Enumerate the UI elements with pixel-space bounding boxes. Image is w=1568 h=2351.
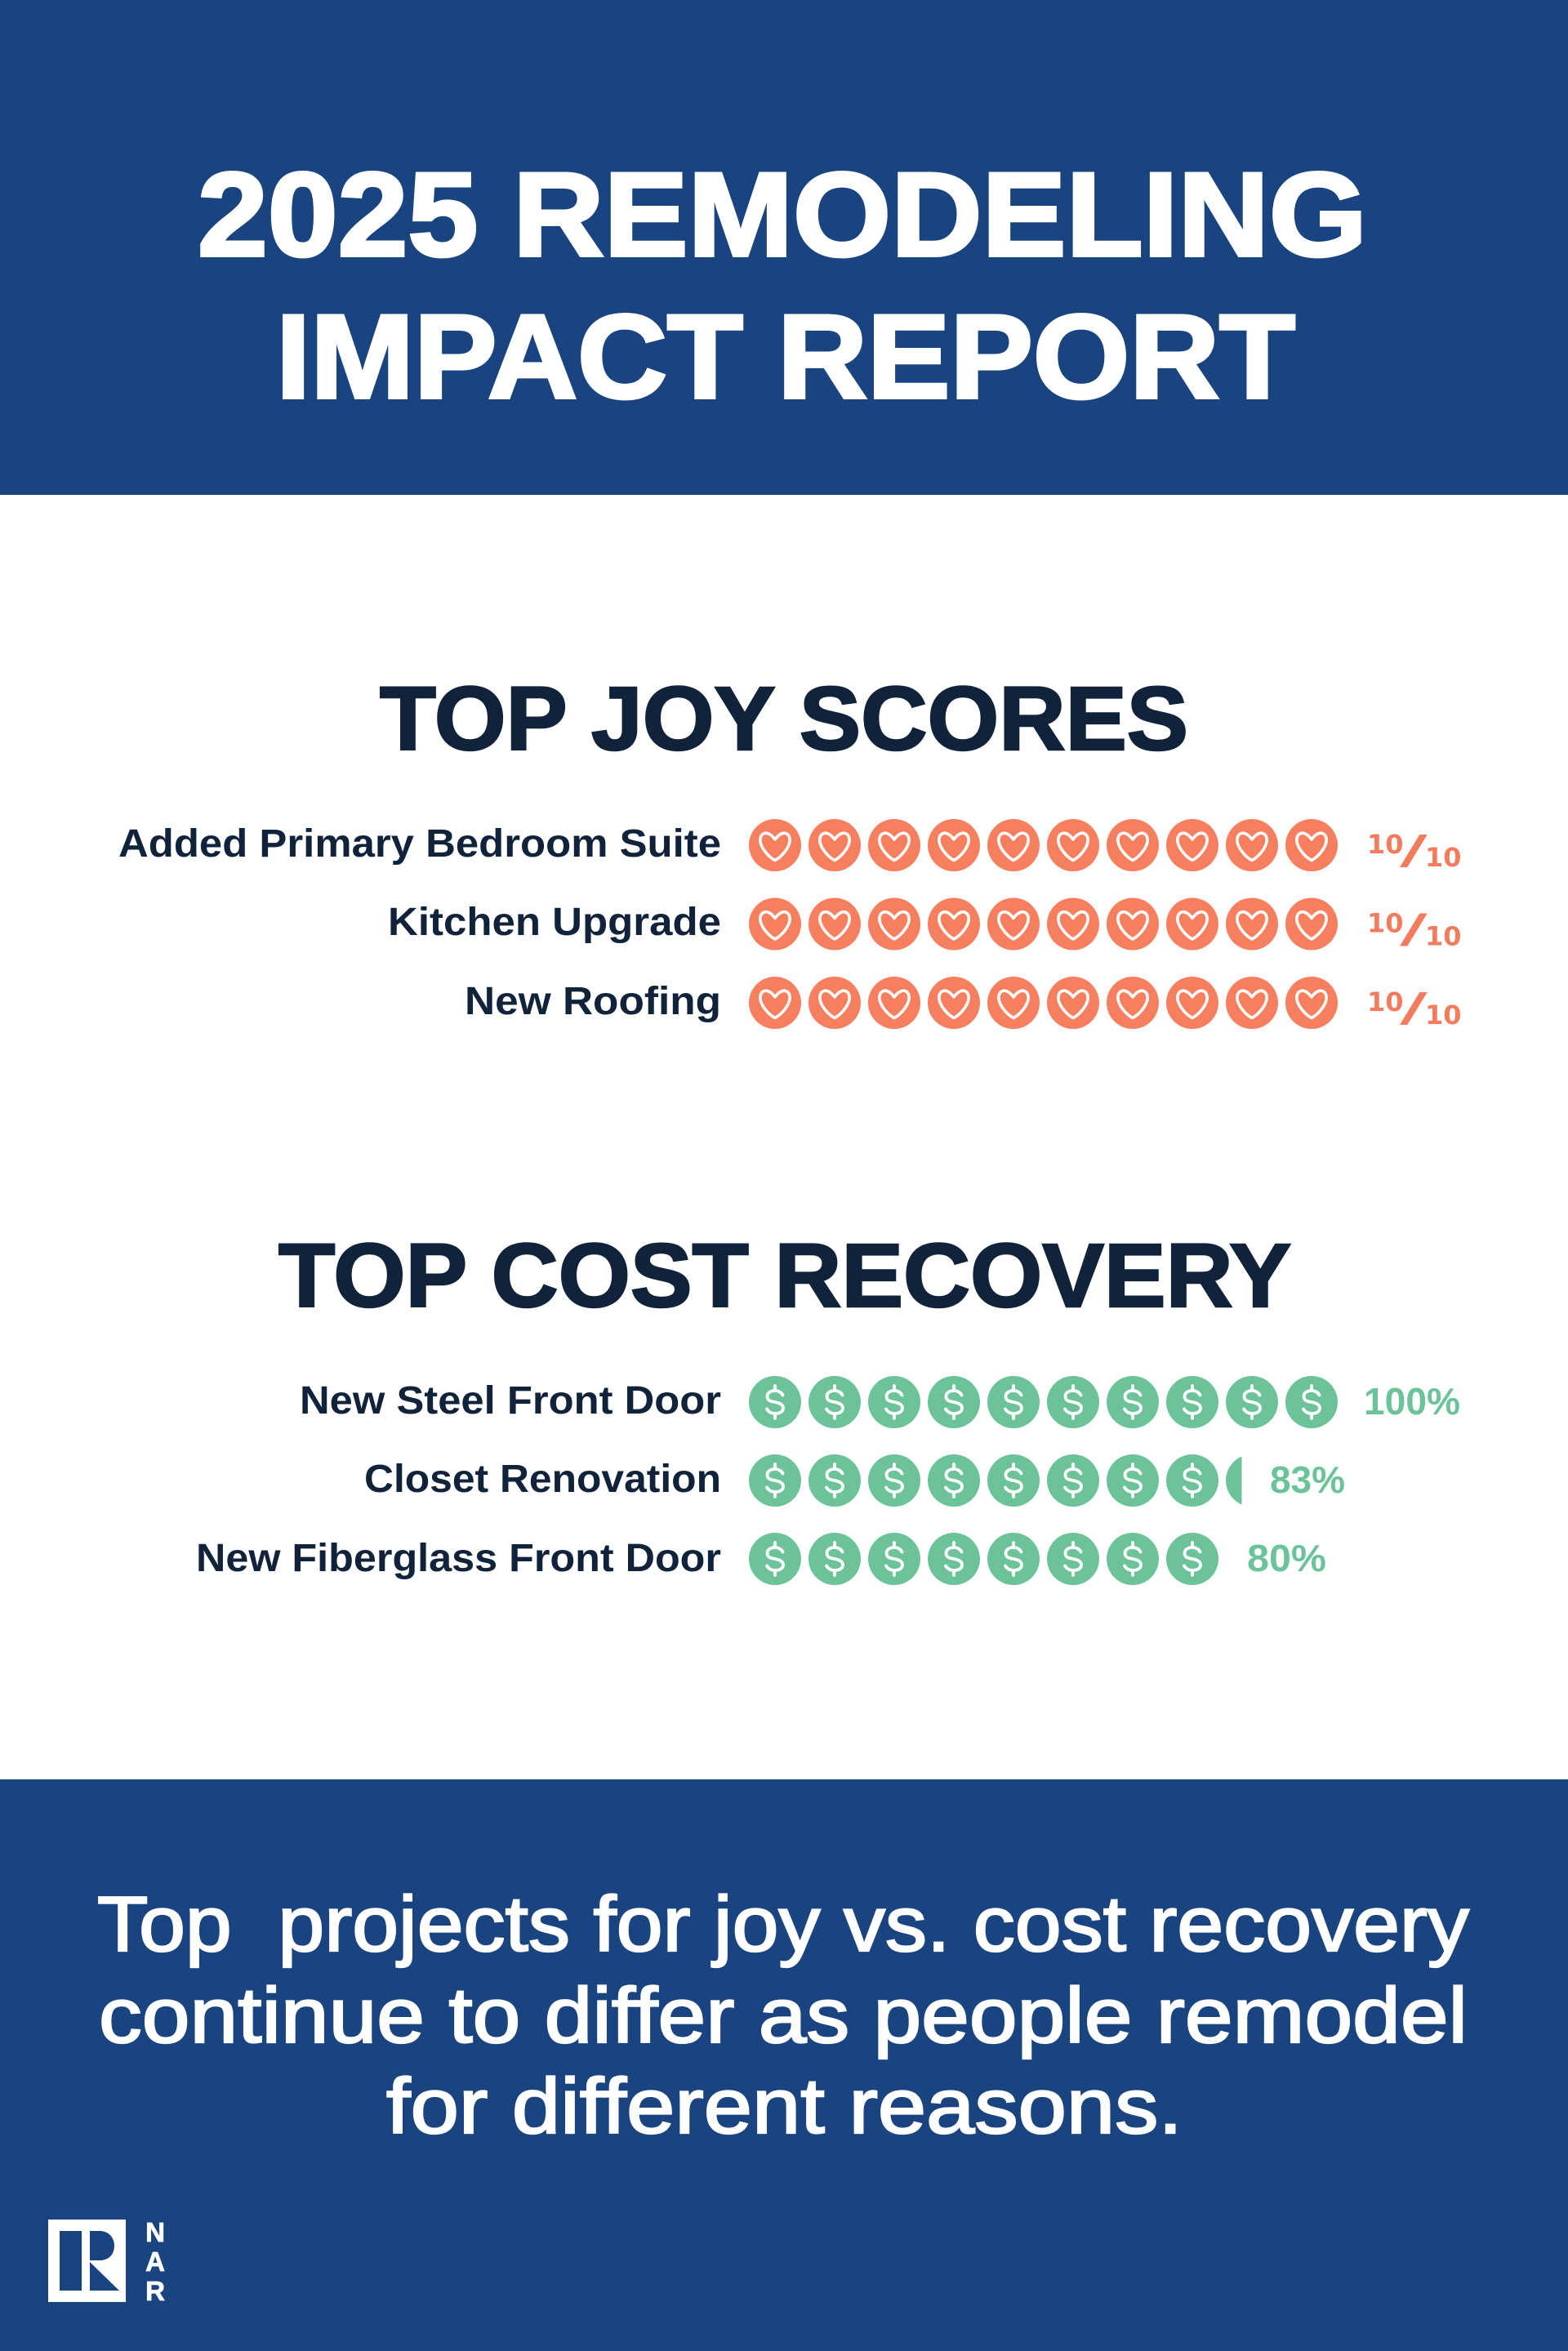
row: new roofing: New Roofing [465, 980, 721, 1023]
title line 2: IMPACT REPORT [276, 290, 1295, 423]
footer statement: Top projects for joy vs. cost recovery [97, 1881, 1469, 1968]
logo: NAR: R [145, 2276, 165, 2306]
heading: top joy scores: TOP JOY SCORES [380, 669, 1188, 769]
logo: NAR: N [145, 2217, 165, 2247]
row: new roofing [465, 977, 1462, 1031]
row: closet renovation [364, 1454, 1345, 1507]
row: new steel front door: 100% [1364, 1380, 1460, 1423]
row: kitchen upgrade: Kitchen Upgrade [388, 901, 721, 944]
row: new steel front door: New Steel Front Door [300, 1379, 721, 1423]
row: kitchen upgrade: 10 [1367, 908, 1404, 939]
footer statement: for different reasons. [386, 2063, 1183, 2150]
row: new fiberglass front door: New Fiberglass Front Door [196, 1537, 721, 1580]
footer statement [97, 1881, 1469, 2150]
logo: NAR [48, 2217, 165, 2306]
row: closet renovation: Closet Renovation [364, 1458, 721, 1501]
title line 1: 2025 REMODELING [198, 148, 1367, 281]
row: new fiberglass front door [196, 1533, 1326, 1585]
footer statement: continue to differ as people remodel [99, 1972, 1468, 2059]
header band [0, 0, 1568, 495]
logo: NAR: A [145, 2246, 165, 2277]
row: new fiberglass front door: 80% [1247, 1537, 1326, 1579]
footer band [0, 1779, 1568, 2351]
row: added primary bedroom suite: Added Primary Bedroom Suite [118, 822, 721, 866]
row: added primary bedroom suite: 10 [1425, 842, 1462, 873]
row: added primary bedroom suite [118, 819, 1462, 873]
row: new steel front door [300, 1376, 1460, 1428]
row: kitchen upgrade: 10 [1425, 921, 1462, 952]
row: new roofing: 10 [1367, 986, 1404, 1017]
row: kitchen upgrade [388, 898, 1462, 952]
row: added primary bedroom suite: 10 [1367, 829, 1404, 860]
row: closet renovation: 83% [1270, 1458, 1345, 1501]
row: new roofing: 10 [1425, 1000, 1462, 1031]
heading: top cost recovery: TOP COST RECOVERY [278, 1226, 1291, 1326]
panel: top joy scores [118, 669, 1462, 1031]
panel: top cost recovery [196, 1226, 1460, 1585]
